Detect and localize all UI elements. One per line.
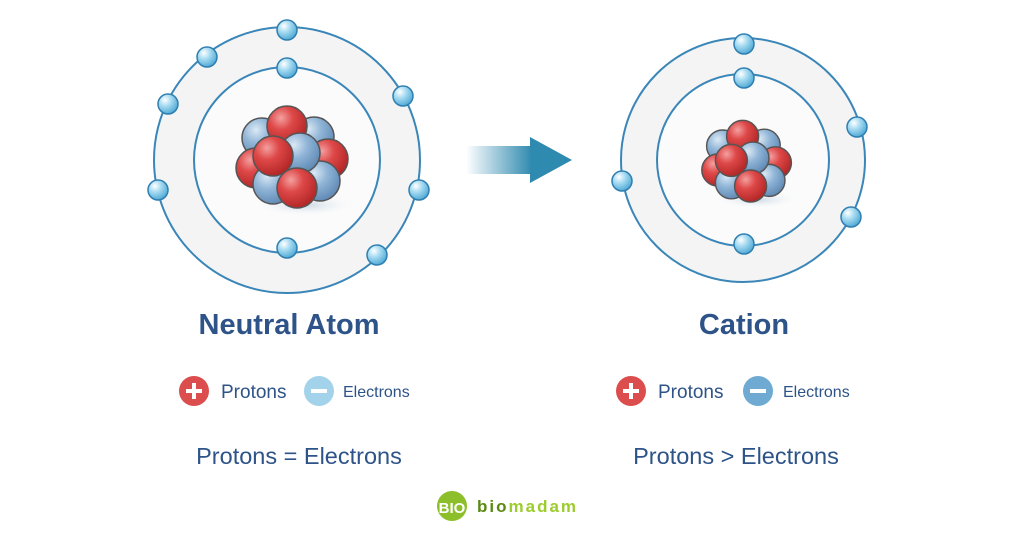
cation atom	[612, 34, 867, 282]
nucleus right	[702, 120, 801, 209]
logo: BIO	[439, 500, 466, 517]
heading: cation: Cation	[699, 309, 789, 341]
legend right	[616, 376, 850, 406]
neutral atom	[148, 20, 429, 293]
equation right: Protons > Electrons	[633, 443, 839, 469]
equation left: Protons = Electrons	[196, 443, 402, 469]
legend right: Protons	[658, 382, 723, 403]
nucleus left	[236, 106, 360, 217]
heading: neutral atom: Neutral Atom	[198, 309, 380, 341]
legend right: Electrons	[783, 384, 850, 401]
electrons right	[612, 34, 867, 254]
legend left	[179, 376, 410, 406]
arrow	[466, 137, 572, 183]
electrons left	[148, 20, 429, 265]
logo	[437, 491, 578, 521]
legend left: Electrons	[343, 384, 410, 401]
legend left: Protons	[221, 382, 286, 403]
logo: biomadam	[477, 497, 578, 516]
